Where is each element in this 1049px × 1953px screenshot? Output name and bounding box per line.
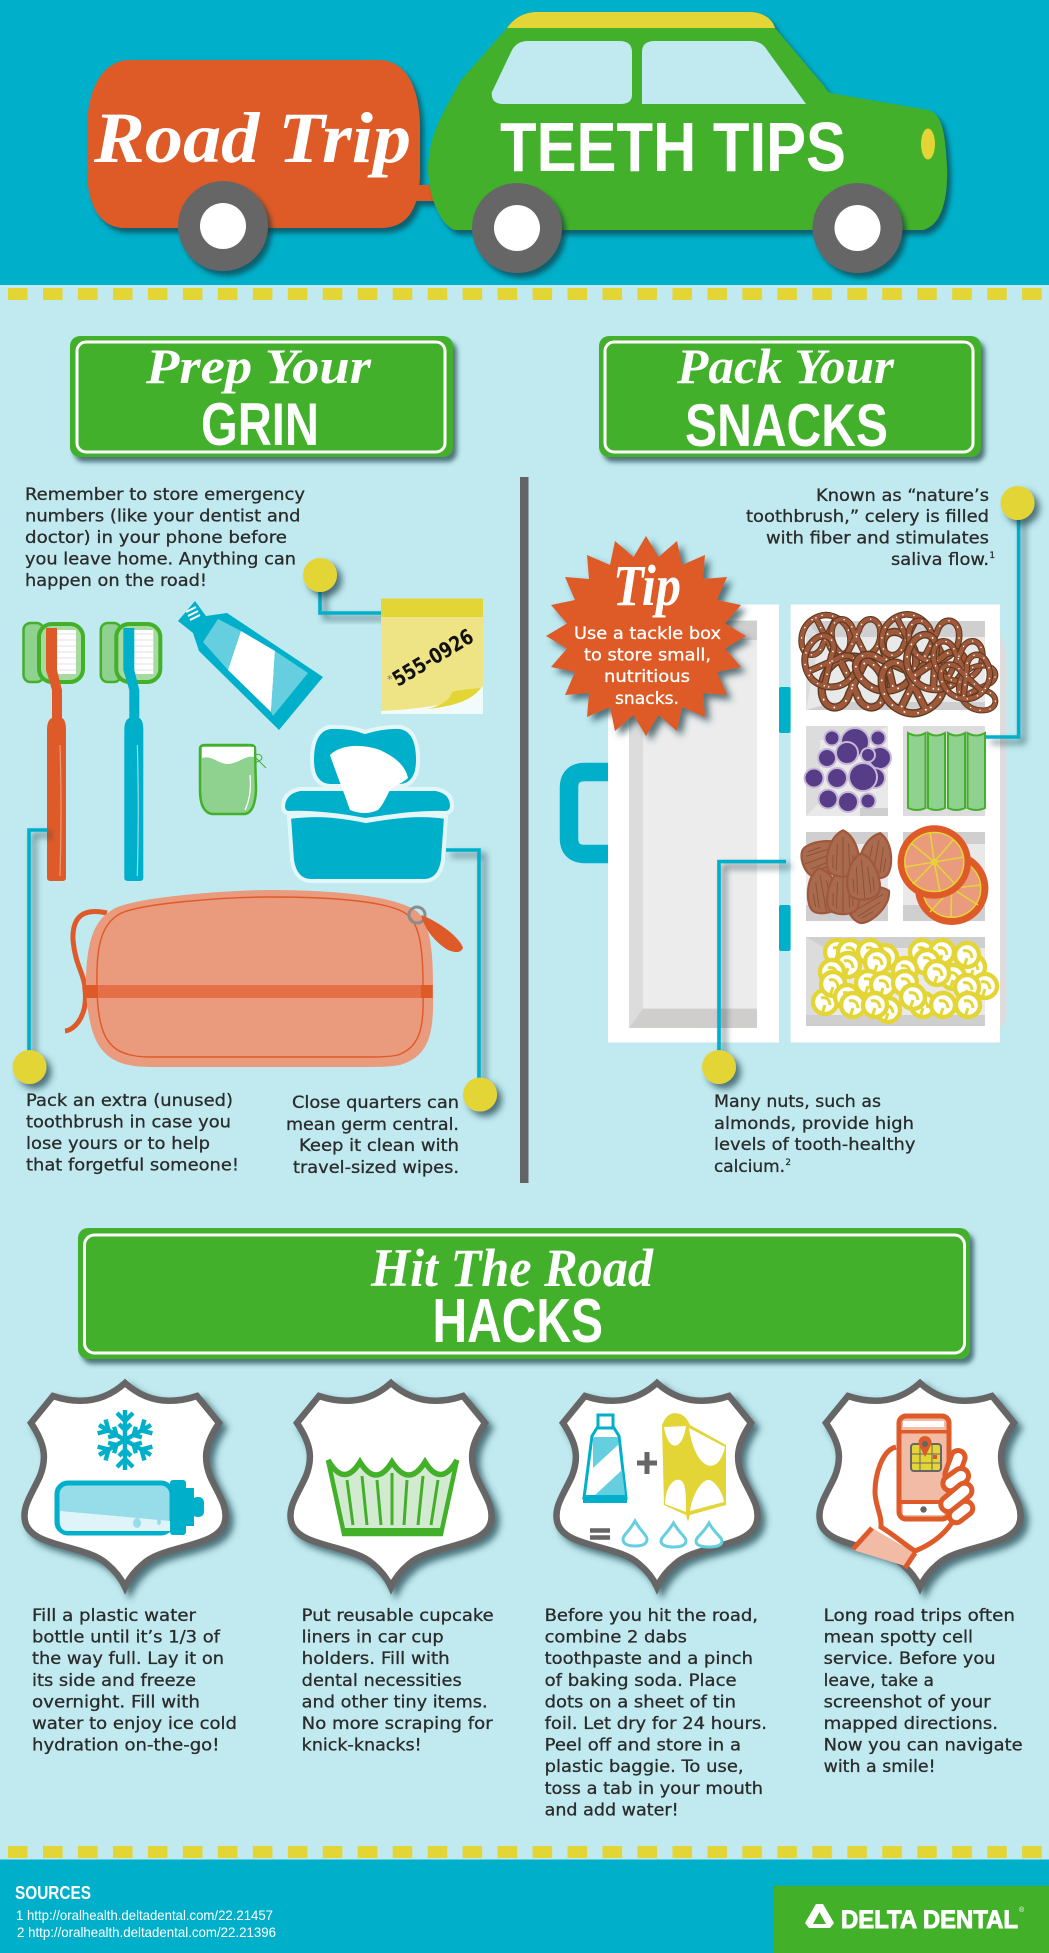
text: almonds: Many nuts, such as [714,1092,881,1112]
text: hack 3: plastic baggie. To use, [545,1757,744,1777]
icon: sticky note with phone number: * [387,673,393,686]
text: emergency numbers: Remember to store emergency [25,485,305,505]
trailer [87,60,435,228]
sign: Hit The Road Hacks: Hit The Road [370,1238,654,1298]
center divider [520,477,528,1183]
text: celery: Known as “nature’s [816,486,989,506]
tip burst: snacks. [615,689,679,709]
footer band [0,1860,1049,1953]
car body [428,12,947,230]
text: hack 3: toss a tab in your mouth [545,1779,763,1799]
Delta Dental logo: ® [1019,1906,1025,1914]
title: Road Trip: Road Trip [93,98,411,178]
text: wipes: mean germ central. [286,1115,459,1135]
callout dot: toothbrush [12,1050,46,1084]
text: almonds: levels of tooth-healthy [714,1135,916,1155]
text: hack 2: Put reusable cupcake [302,1606,494,1626]
text: emergency numbers: doctor) in your phone before [25,528,287,548]
car front window [642,41,806,104]
sources: 2 http://oralhealth.deltadental.com/22.21396 [17,1924,276,1940]
text: celery: saliva flow. [891,550,989,570]
text: almonds: calcium. [714,1157,785,1177]
text: almonds: almonds, provide high [714,1114,914,1134]
text: hack 4 [824,1606,1023,1777]
tip burst: Tip [613,553,681,618]
box left panel [608,604,779,1042]
snack: blueberries [804,728,891,812]
icon: hand and sleeve [853,1447,955,1568]
car roof rack [507,12,775,28]
box back edge [995,620,1006,1035]
icon: cupcake liner [328,1460,457,1535]
sign: Pack Your Snacks: SNACKS [685,392,888,459]
icon: fingers [938,1449,976,1526]
sources: 1 http://oralhealth.deltadental.com/22.21457 [16,1907,273,1923]
text: celery: toothbrush,” celery is filled [746,507,989,527]
connector: almonds [719,862,786,1060]
text: hack 1: the way full. Lay it on [32,1649,224,1669]
text: celery: 1 [990,551,995,561]
text: extra toothbrush [26,1091,239,1176]
compartments [806,621,985,1026]
sources: SOURCES [15,1883,91,1903]
text: hack 3: foil. Let dry for 24 hours. [545,1714,767,1734]
text: hack 3: dots on a sheet of tin [545,1692,736,1712]
text: extra toothbrush: lose yours or to help [26,1134,210,1154]
text: hack 4: mapped directions. [824,1714,998,1734]
icon: water bottle [57,1480,204,1535]
icon: wipes box [283,727,452,881]
text: hack 3: toothpaste and a pinch [545,1649,753,1669]
text: hack 3: of baking soda. Place [545,1671,737,1691]
headlight [921,128,935,160]
text: extra toothbrush: Pack an extra (unused) [26,1091,233,1111]
text: emergency numbers [25,485,305,591]
text: hack 2: knick-knacks! [302,1736,422,1756]
text: almonds: 2 [786,1158,791,1168]
box right panel [791,604,1000,1042]
tip burst: Use a tackle box [574,624,721,644]
text: wipes: Keep it clean with [299,1136,459,1156]
icon: smartphone [899,1416,949,1519]
shield: frozen water bottle [24,1383,226,1587]
text: hack 4: mean spotty cell [824,1628,973,1648]
sign: Prep Your Grin: Prep Your [145,338,372,394]
illustration: trailer and car header [87,12,947,273]
text: hack 2: dental necessities [302,1671,462,1691]
header band [0,0,1049,285]
text: hack 4: Now you can navigate [824,1736,1023,1756]
tackle box [569,604,1006,1042]
text: emergency numbers: numbers (like your dentist and [25,506,300,526]
text: hack 1 [32,1606,237,1756]
text: hack 1: water to enjoy ice cold [32,1714,237,1734]
snack: almonds [798,830,897,927]
connector: celery [986,515,1019,737]
sign: Pack Your Snacks [599,336,981,459]
connector: wipes [446,850,479,1085]
text: hack 4: service. Before you [824,1649,996,1669]
sources [15,1883,276,1940]
icon: sticky note with phone number: 555-0926 [388,624,478,691]
icon: sticky note with phone number [381,598,483,714]
trailer wheel [178,181,268,271]
shield: toothpaste tabs [556,1383,758,1587]
icon: water drops [623,1521,722,1547]
text: hack 2 [302,1606,494,1756]
sign: Prep Your Grin [70,336,453,458]
connector: note [320,585,383,613]
text: wipes: Close quarters can [292,1093,459,1113]
text: wipes [286,1093,459,1178]
icon: teal toothbrush [101,623,160,881]
text: hack 4: Long road trips often [824,1606,1015,1626]
text: hack 2: and other tiny items. [302,1692,488,1712]
text: hack 1: bottle until it’s 1/3 of [32,1628,221,1648]
sign: Hit The Road Hacks: HACKS [432,1287,603,1356]
snack: popcorn [813,940,997,1022]
text: hack 1: Fill a plastic water [32,1606,196,1626]
text: hack 3: combine 2 dabs [545,1628,687,1648]
text: wipes: travel-sized wipes. [293,1158,459,1178]
text: hack 1: its side and freeze [32,1671,196,1691]
text: celery: with fiber and stimulates [766,528,989,548]
text: hack 4: with a smile! [824,1757,936,1777]
car wheel front [812,183,902,273]
callout dot: celery [1001,486,1035,520]
callout dot: wipes [463,1078,497,1112]
icon: small toothpaste tube [583,1415,627,1503]
text: hack 2: liners in car cup [302,1628,444,1648]
icon: snowflake [95,1410,155,1470]
icon: floss [200,745,266,814]
icon: toiletry pouch [65,890,463,1067]
car rear window [492,41,632,104]
connector: toothbrush [29,830,47,1060]
text: emergency numbers: you leave home. Anything can [25,550,296,570]
text: extra toothbrush: toothbrush in case you [26,1112,231,1132]
icon: plus sign [637,1452,657,1474]
text: hack 2: holders. Fill with [302,1649,450,1669]
snack: celery [908,733,985,810]
callout dot: note [303,558,337,592]
dashed road line bottom [0,1846,1049,1858]
text: almonds [714,1092,916,1177]
text: extra toothbrush: that forgetful someone! [26,1156,239,1176]
box handle [569,772,609,854]
snack: pretzels [794,614,997,713]
title: Teeth Tips: TEETH TIPS [500,108,846,186]
snack: orange slices [898,825,988,925]
tip burst [546,536,746,736]
shield: phone map [819,1383,1021,1587]
text: hack 3: Peel off and store in a [545,1736,741,1756]
hinges [779,687,791,951]
text: hack 2: No more scraping for [302,1714,493,1734]
Delta Dental logo [774,1886,1049,1953]
icon: foil sheet [662,1413,726,1522]
callout dot: almonds [702,1050,736,1084]
text: celery [746,486,995,570]
tip burst: to store small, [584,646,711,666]
icon: orange toothbrush [24,623,83,881]
sign: Hit The Road Hacks [78,1228,970,1359]
text: hack 4: leave, take a [824,1671,934,1691]
text: hack 3 [545,1606,767,1820]
Delta Dental logo: DELTA DENTAL [841,1906,1018,1934]
text: hack 1: overnight. Fill with [32,1692,200,1712]
text: hack 4: screenshot of your [824,1692,991,1712]
text: emergency numbers: happen on the road! [25,571,207,591]
text: hack 3: Before you hit the road, [545,1606,758,1626]
sign: Prep Your Grin: GRIN [201,391,319,458]
tip burst: nutritious [604,667,690,687]
icon: toothpaste tube [178,601,323,730]
dashed road line top [0,288,1049,300]
shield: cupcake liner [290,1383,492,1587]
sign: Pack Your Snacks: Pack Your [676,338,895,394]
text: hack 1: hydration on-the-go! [32,1736,220,1756]
icon: equals sign [590,1530,610,1538]
text: hack 3: and add water! [545,1800,679,1820]
car wheel rear [472,183,562,273]
